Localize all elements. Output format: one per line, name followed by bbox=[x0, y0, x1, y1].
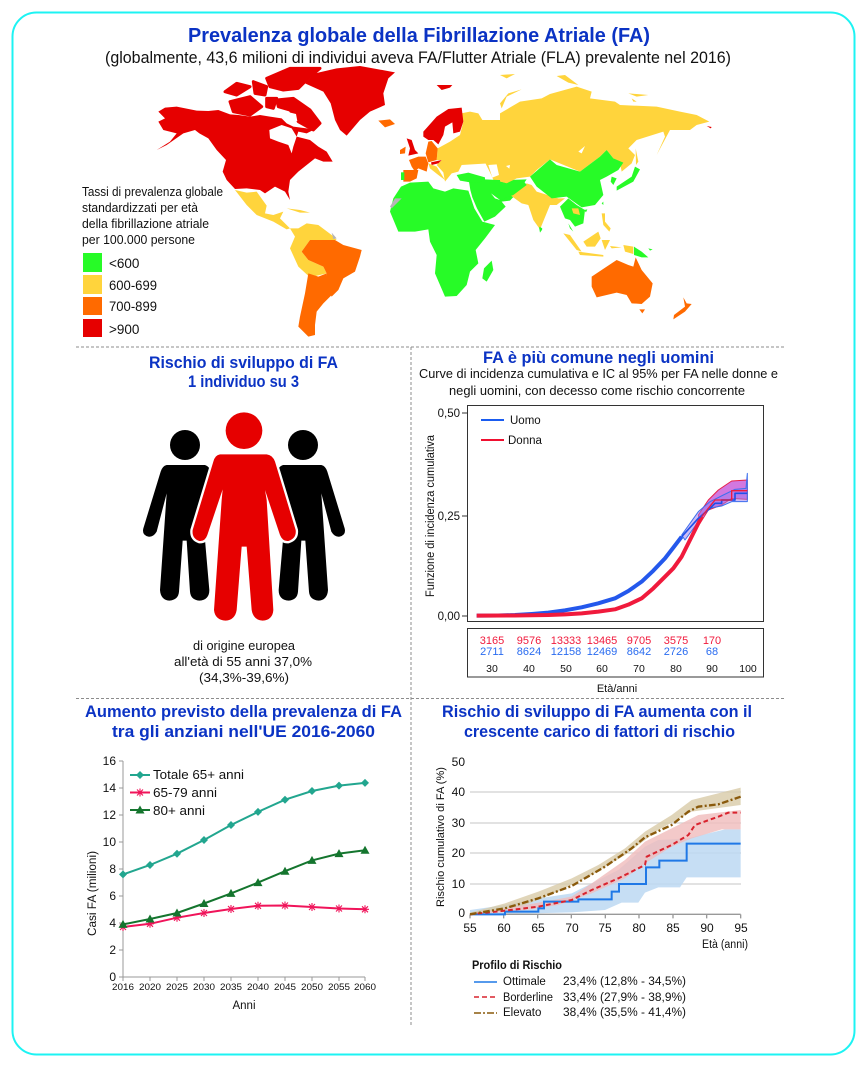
legend: risk profile: 33,4% (27,9% - 38,9%) bbox=[563, 992, 686, 1004]
map legend: <600 bbox=[109, 256, 139, 271]
chart: cumulative risk by profile: 85 bbox=[666, 921, 680, 935]
chart: cumulative risk by profile: 65 bbox=[531, 921, 545, 935]
table: numbers at risk: 9576 bbox=[517, 635, 541, 647]
table: numbers at risk: 90 bbox=[706, 663, 718, 675]
chart: EU projection lines: 2040 bbox=[247, 982, 269, 992]
chart: cumulative incidence: 0,00 bbox=[438, 611, 460, 623]
chart: EU projection lines: 16 bbox=[103, 754, 116, 768]
heading: sex difference: negli uomini, con decesso come rischio concorrente bbox=[449, 384, 745, 398]
table: numbers at risk: 40 bbox=[523, 663, 535, 675]
title: (globalmente, 43,6 milioni di individui aveva FA/Flutter Atriale (FLA) prevalente nel 2016) bbox=[105, 49, 731, 67]
table: numbers at risk: Età/anni bbox=[597, 683, 637, 695]
map legend: della fibrillazione atriale bbox=[82, 217, 209, 231]
legend: sex: Uomo bbox=[510, 415, 541, 427]
heading: lifetime risk bbox=[149, 353, 338, 391]
text: European origin risk: (34,3%-39,6%) bbox=[199, 671, 289, 685]
chart: EU projection lines: 2 bbox=[109, 943, 116, 957]
legend: risk profile: Profilo di Rischio bbox=[472, 960, 562, 972]
chart: EU projection lines: 6 bbox=[109, 889, 116, 903]
legend: risk profile: Elevato bbox=[503, 1007, 541, 1019]
chart: cumulative risk by profile: 80 bbox=[632, 921, 646, 935]
icon: three people, one red bbox=[143, 412, 345, 621]
chart: EU projection lines: 2030 bbox=[193, 982, 215, 992]
heading: projected prevalence: Aumento previsto della prevalenza di FA bbox=[85, 702, 402, 721]
chart: cumulative risk by profile: 60 bbox=[497, 921, 511, 935]
chart: EU projection lines: 14 bbox=[103, 781, 116, 795]
chart: EU projection lines: Anni bbox=[232, 1000, 256, 1012]
chart: EU projection lines: 2060 bbox=[354, 982, 376, 992]
text: European origin risk: all'età di 55 anni 37,0% bbox=[174, 655, 312, 669]
chart: EU projection lines: 2045 bbox=[274, 982, 296, 992]
table: numbers at risk: 2711 bbox=[480, 646, 504, 658]
map legend: standardizzati per età bbox=[82, 201, 198, 215]
chart: cumulative risk by profile: 50 bbox=[452, 755, 465, 769]
table: numbers at risk: 68 bbox=[706, 646, 718, 658]
panel: sex difference bbox=[419, 348, 778, 695]
chart: cumulative incidence: 0,25 bbox=[438, 511, 460, 523]
heading: projected prevalence bbox=[85, 702, 402, 741]
table: numbers at risk: 60 bbox=[596, 663, 608, 675]
chart: EU projection lines: Casi FA (milioni) bbox=[87, 851, 99, 936]
legend: risk profile bbox=[472, 960, 686, 1019]
table: numbers at risk: 13333 bbox=[551, 635, 581, 647]
table: numbers at risk: 30 bbox=[486, 663, 498, 675]
legend: age groups bbox=[130, 767, 244, 818]
chart: cumulative risk by profile: 40 bbox=[452, 785, 465, 799]
chart: EU projection lines: 8 bbox=[109, 862, 116, 876]
chart: cumulative risk by profile: 95 bbox=[734, 921, 748, 935]
chart: EU projection lines: 4 bbox=[109, 916, 116, 930]
chart: cumulative risk by profile: 75 bbox=[598, 921, 612, 935]
table: numbers at risk: 13465 bbox=[587, 635, 617, 647]
heading: sex difference: FA è più comune negli uomini bbox=[483, 348, 714, 367]
chart: cumulative risk by profile: 30 bbox=[452, 816, 465, 830]
text: European origin risk bbox=[174, 639, 312, 685]
text: European origin risk: di origine europea bbox=[193, 639, 295, 653]
map legend: >900 bbox=[109, 322, 139, 337]
chart: cumulative risk by profile: 10 bbox=[452, 877, 465, 891]
panel: risk factor burden bbox=[435, 702, 752, 1019]
chart: EU projection lines: 2055 bbox=[328, 982, 350, 992]
chart: EU projection lines: 0 bbox=[109, 970, 116, 984]
table: numbers at risk: 12469 bbox=[587, 646, 617, 658]
legend: risk profile: 38,4% (35,5% - 41,4%) bbox=[563, 1007, 686, 1019]
chart: cumulative risk by profile: 0 bbox=[458, 906, 465, 920]
map legend: Tassi di prevalenza globale bbox=[82, 185, 223, 199]
legend: age groups: Totale 65+ anni bbox=[153, 767, 244, 782]
table: numbers at risk: 50 bbox=[560, 663, 572, 675]
table: numbers at risk bbox=[468, 628, 764, 695]
heading: risk factor burden bbox=[442, 702, 752, 741]
chart: EU projection lines: 2020 bbox=[139, 982, 161, 992]
table: numbers at risk: 9705 bbox=[627, 635, 651, 647]
chart: EU projection lines: 2035 bbox=[220, 982, 242, 992]
legend: risk profile: Ottimale bbox=[503, 976, 546, 988]
chart: cumulative incidence: 0,50 bbox=[438, 408, 460, 420]
table: numbers at risk: 70 bbox=[633, 663, 645, 675]
chart: cumulative risk by profile: 70 bbox=[565, 921, 579, 935]
chart: cumulative incidence bbox=[425, 406, 764, 623]
heading: sex difference bbox=[419, 348, 778, 398]
table: numbers at risk: 3165 bbox=[480, 635, 504, 647]
chart: EU projection lines: 10 bbox=[103, 835, 116, 849]
heading: sex difference: Curve di incidenza cumulativa e IC al 95% per FA nelle donne e bbox=[419, 367, 778, 381]
heading: risk factor burden: crescente carico di fattori di rischio bbox=[464, 722, 735, 741]
chart: cumulative risk by profile bbox=[435, 755, 748, 951]
chart: cumulative risk by profile: 20 bbox=[452, 846, 465, 860]
title bbox=[105, 25, 731, 67]
table: numbers at risk: 100 bbox=[739, 663, 757, 675]
chart: cumulative risk by profile: Rischio cumulativo di FA (%) bbox=[435, 767, 447, 907]
table: numbers at risk: 8642 bbox=[627, 646, 651, 658]
chart: EU projection lines: 12 bbox=[103, 808, 116, 822]
map legend bbox=[82, 185, 223, 337]
chart: cumulative risk by profile: 90 bbox=[700, 921, 714, 935]
table: numbers at risk: 170 bbox=[703, 635, 721, 647]
legend: sex bbox=[481, 415, 542, 447]
heading: projected prevalence: tra gli anziani nell'UE 2016-2060 bbox=[112, 722, 375, 741]
legend: age groups: 80+ anni bbox=[153, 803, 205, 818]
chart: EU projection lines: 2025 bbox=[166, 982, 188, 992]
legend: sex: Donna bbox=[508, 435, 542, 447]
heading: lifetime risk: Rischio di sviluppo di FA bbox=[149, 353, 338, 372]
chart: cumulative incidence: Funzione di incidenza cumulativa bbox=[425, 434, 437, 597]
table: numbers at risk: 12158 bbox=[551, 646, 581, 658]
map legend: 700-899 bbox=[109, 299, 157, 314]
map legend: per 100.000 persone bbox=[82, 233, 195, 247]
legend: risk profile: 23,4% (12,8% - 34,5%) bbox=[563, 976, 686, 988]
chart: EU projection lines: 2050 bbox=[301, 982, 323, 992]
chart: EU projection lines: 2016 bbox=[112, 982, 134, 992]
legend: age groups: 65-79 anni bbox=[153, 785, 217, 800]
table: numbers at risk: 2726 bbox=[664, 646, 688, 658]
panel: projected prevalence bbox=[85, 702, 402, 1012]
chart: EU projection lines bbox=[87, 754, 376, 1012]
map legend: 600-699 bbox=[109, 278, 157, 293]
legend: risk profile: Borderline bbox=[503, 992, 553, 1004]
heading: lifetime risk: 1 individuo su 3 bbox=[188, 372, 299, 391]
heading: risk factor burden: Rischio di sviluppo di FA aumenta con il bbox=[442, 702, 752, 721]
panel: lifetime risk bbox=[143, 353, 345, 685]
title: Prevalenza globale della Fibrillazione Atriale (FA) bbox=[188, 25, 650, 47]
chart: cumulative risk by profile: Età (anni) bbox=[702, 939, 748, 951]
table: numbers at risk: 80 bbox=[670, 663, 682, 675]
world map bbox=[157, 66, 712, 337]
table: numbers at risk: 8624 bbox=[517, 646, 541, 658]
table: numbers at risk: 3575 bbox=[664, 635, 688, 647]
chart: cumulative risk by profile: 55 bbox=[463, 921, 477, 935]
